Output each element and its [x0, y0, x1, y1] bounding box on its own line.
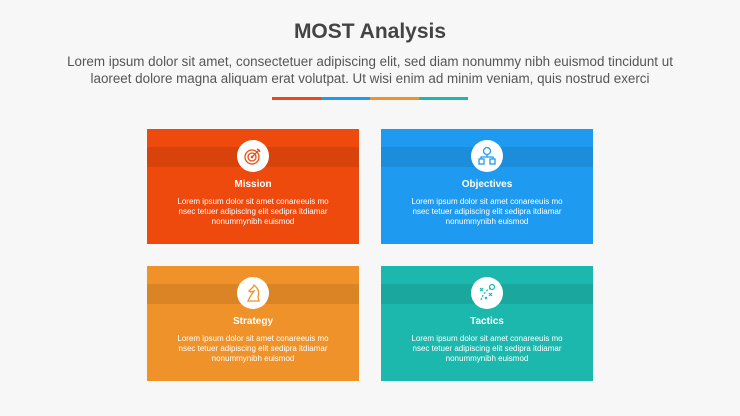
heading: Tactics — [470, 316, 504, 327]
divider line — [272, 97, 468, 100]
panel: mission — [147, 129, 359, 244]
panel: tactics — [381, 266, 593, 381]
text: Lorem ipsum dolor sit amet conareeuis mo — [411, 197, 563, 206]
icon: tactics — [471, 277, 503, 309]
subtitle: Lorem ipsum dolor sit amet, consectetuer adipiscing elit, sed diam nonummy nibh euismod tincidunt ut laoreet dolore magna aliquam erat volutpat. Ut wisi enim ad minim veniam, quis nostrud exerci — [67, 54, 673, 86]
title: MOST Analysis — [294, 20, 446, 43]
text: nonummynibh euismod — [446, 217, 528, 226]
heading: Objectives — [462, 179, 512, 190]
icon: chess knight — [237, 277, 269, 309]
panel: strategy — [147, 266, 359, 381]
icon: objectives — [471, 140, 503, 172]
heading: Mission — [234, 179, 272, 190]
text: nonummynibh euismod — [446, 354, 528, 363]
text: nsec tetuer adipiscing elit sedipra itdiamar — [413, 344, 561, 353]
text: Lorem ipsum dolor sit amet conareeuis mo — [177, 197, 329, 206]
text: nonummynibh euismod — [212, 217, 294, 226]
text: nsec tetuer adipiscing elit sedipra itdiamar — [413, 207, 561, 216]
text: Lorem ipsum dolor sit amet conareeuis mo — [411, 334, 563, 343]
icon: target — [237, 140, 269, 172]
heading: Strategy — [233, 316, 273, 327]
panel: objectives — [381, 129, 593, 244]
text — [411, 334, 563, 363]
text: nsec tetuer adipiscing elit sedipra itdiamar — [179, 207, 327, 216]
text — [411, 197, 563, 226]
text — [177, 197, 329, 226]
text: nsec tetuer adipiscing elit sedipra itdiamar — [179, 344, 327, 353]
text: Lorem ipsum dolor sit amet conareeuis mo — [177, 334, 329, 343]
text: nonummynibh euismod — [212, 354, 294, 363]
text — [177, 334, 329, 363]
